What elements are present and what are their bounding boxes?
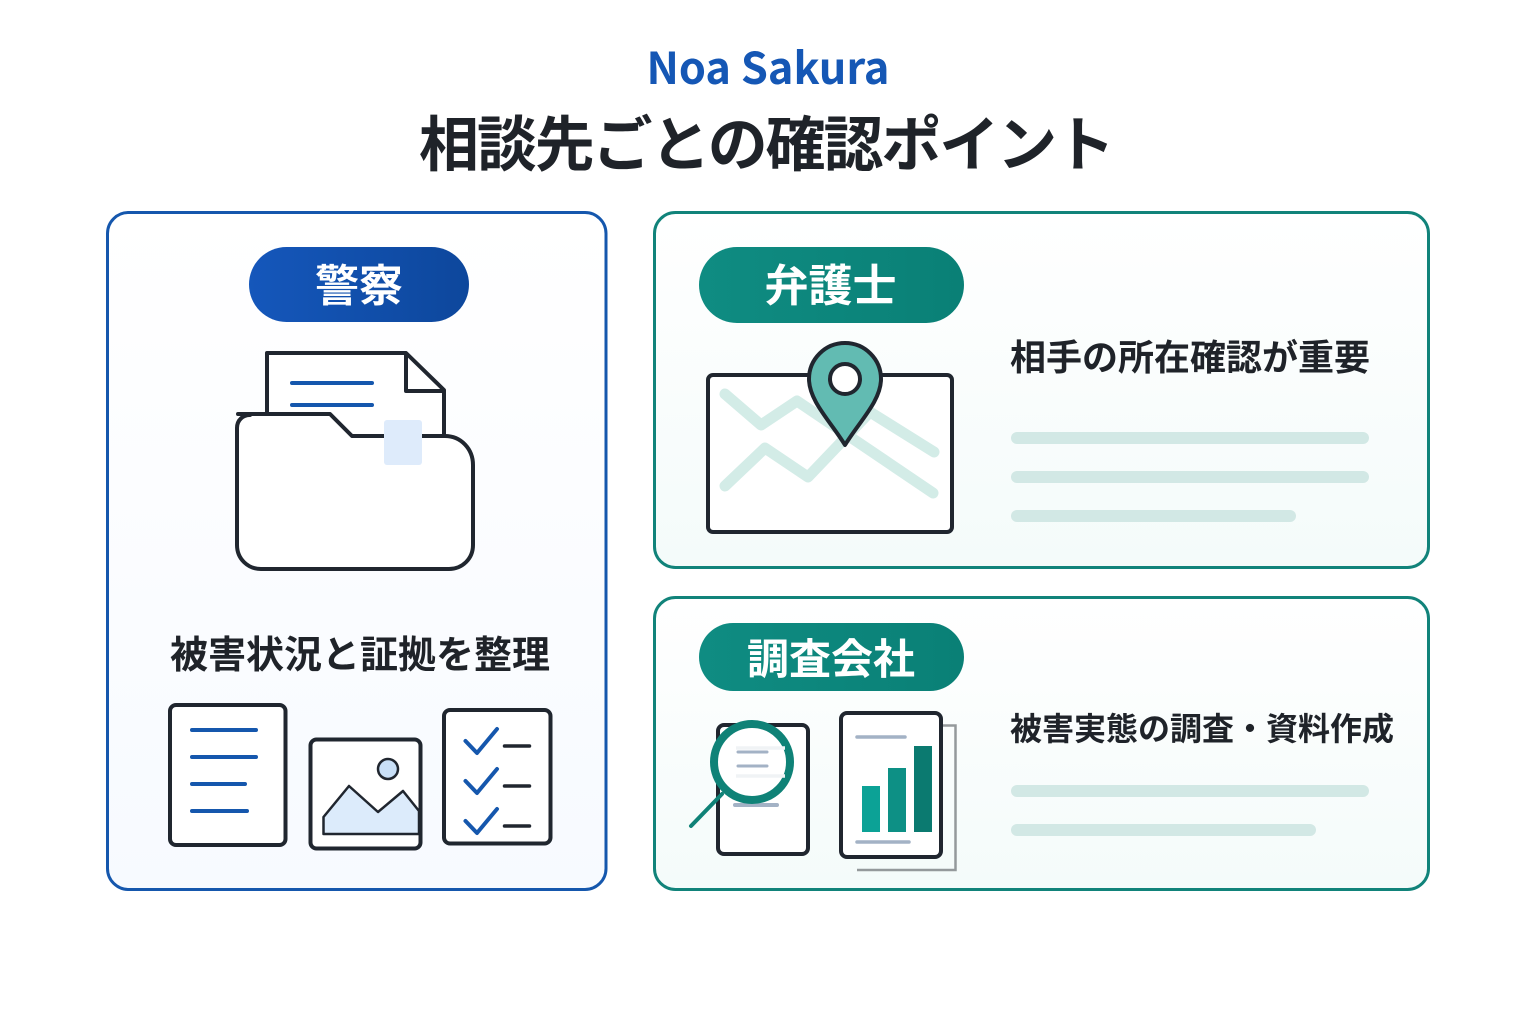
badge: investigation company <box>699 623 964 691</box>
icon: report with bar chart <box>841 713 956 870</box>
icon: magnified document <box>691 724 808 854</box>
brand name: Noa Sakura <box>646 33 890 97</box>
badge: lawyer <box>699 247 964 323</box>
placeholder text lines: investigation company <box>1011 785 1369 836</box>
icon: map with pin <box>708 343 952 532</box>
title: 相談先ごとの確認ポイント <box>419 97 1115 184</box>
icon: photo <box>310 740 420 848</box>
icon: checklist <box>444 710 550 844</box>
panel: police <box>108 212 606 890</box>
subheading: lawyer: 相手の所在確認が重要 <box>1010 329 1370 381</box>
subheading: police: 被害状況と証拠を整理 <box>170 624 550 679</box>
icon: folder with document <box>237 353 473 569</box>
badge: police: 警察 <box>315 250 403 314</box>
panel: investigation company <box>654 598 1428 890</box>
badge: police <box>249 247 469 322</box>
placeholder text lines: lawyer <box>1011 432 1369 522</box>
badge: lawyer: 弁護士 <box>764 250 896 314</box>
panel: lawyer <box>654 212 1428 568</box>
badge: investigation company: 調査会社 <box>747 626 915 687</box>
subheading: investigation company: 被害実態の調査・資料作成 <box>1010 704 1394 750</box>
icon: document <box>170 705 286 845</box>
